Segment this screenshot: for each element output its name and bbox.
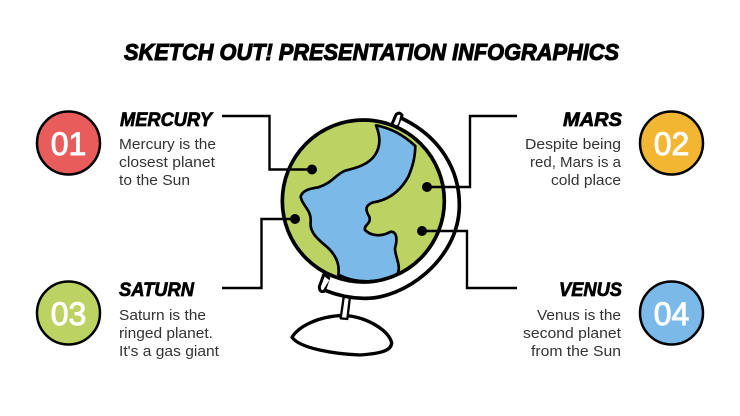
text: Venus description bbox=[523, 307, 622, 360]
connector: Mars bbox=[422, 116, 517, 192]
text: Venus description: second planet bbox=[523, 325, 622, 342]
text: Mars description: cold place bbox=[551, 172, 621, 189]
globe bottom pin bbox=[319, 274, 331, 292]
badge 02 bbox=[640, 112, 703, 174]
globe ocean bbox=[301, 125, 415, 281]
heading: Saturn: SATURN bbox=[119, 280, 195, 301]
connector: Venus bbox=[417, 226, 517, 288]
badge 02: 02 bbox=[654, 126, 689, 162]
text: Saturn description: ringed planet. bbox=[119, 325, 213, 342]
panel: Venus bbox=[523, 280, 703, 360]
text: Mars description bbox=[525, 136, 622, 189]
globe top pin bbox=[391, 113, 402, 131]
text: Mercury description: closest planet bbox=[119, 154, 216, 171]
panel: Mercury bbox=[37, 110, 216, 189]
badge 04 bbox=[640, 282, 703, 344]
text: Venus description: Venus is the bbox=[537, 307, 621, 324]
text: Mercury description: to the Sun bbox=[119, 172, 190, 189]
heading: Venus: VENUS bbox=[559, 280, 622, 301]
text: Mercury description: Mercury is the bbox=[119, 136, 216, 153]
badge 01: 01 bbox=[51, 126, 86, 162]
globe outline bbox=[282, 120, 444, 282]
globe meridian arc bbox=[326, 118, 459, 298]
panel: Mars bbox=[525, 110, 703, 189]
text: Mercury description bbox=[119, 136, 216, 189]
globe stand neck bbox=[341, 295, 350, 319]
badge 01 bbox=[37, 112, 100, 174]
text: Saturn description: It's a gas giant bbox=[119, 343, 220, 360]
globe land bbox=[283, 120, 444, 282]
globe illustration bbox=[282, 113, 459, 355]
text: Mars description: Despite being bbox=[525, 136, 621, 153]
text: Saturn description bbox=[119, 307, 220, 360]
connector: Mercury bbox=[222, 116, 317, 174]
text: Venus description: from the Sun bbox=[531, 343, 621, 360]
title: SKETCH OUT! PRESENTATION INFOGRAPHICS bbox=[124, 39, 620, 65]
text: Mars description: red, Mars is a bbox=[530, 154, 622, 171]
text: Saturn description: Saturn is the bbox=[119, 307, 206, 324]
heading: Mercury: MERCURY bbox=[120, 110, 214, 131]
badge 03: 03 bbox=[51, 296, 86, 332]
connector: Saturn bbox=[222, 214, 300, 288]
badge 04: 04 bbox=[654, 296, 689, 332]
panel: Saturn bbox=[37, 280, 220, 360]
heading: Mars: MARS bbox=[563, 110, 622, 131]
badge 03 bbox=[37, 282, 100, 344]
globe stand base bbox=[292, 315, 392, 355]
